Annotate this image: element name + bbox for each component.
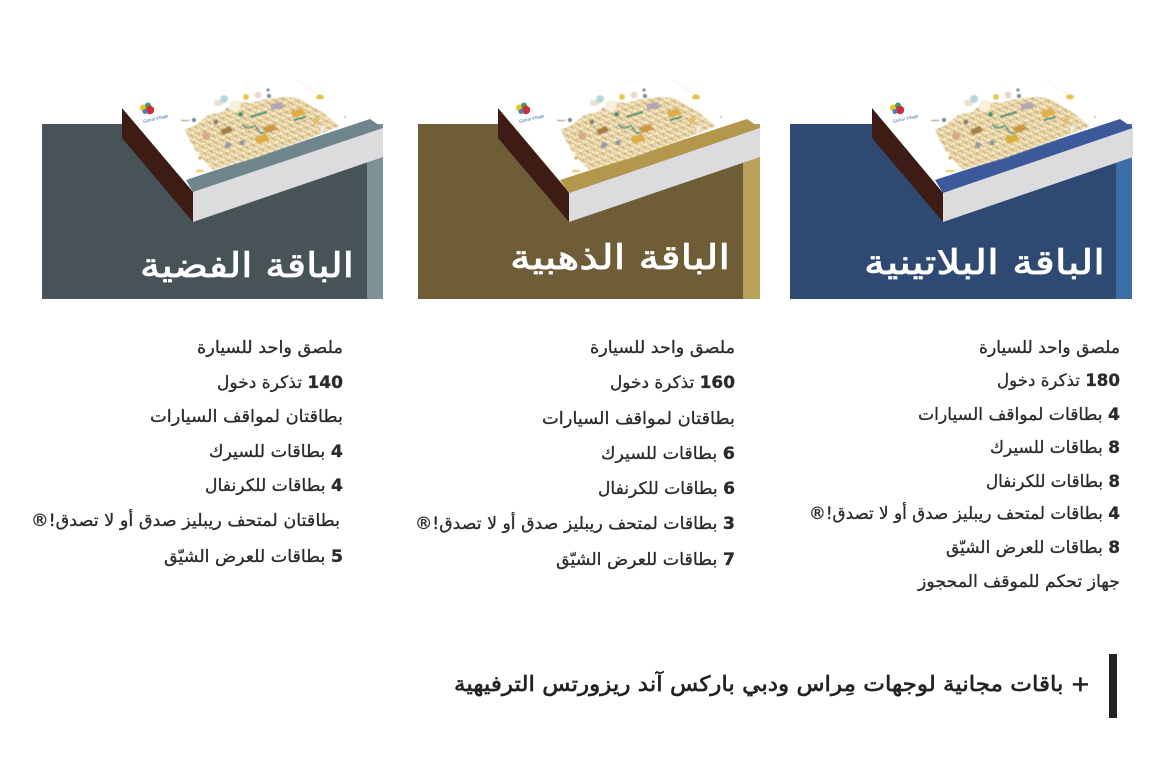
list: platinum package benefits: 8 بطاقات للسيرك <box>990 438 1120 458</box>
book illustration: silver <box>122 70 383 222</box>
panel accent stripe <box>743 124 760 299</box>
list: gold package benefits: ملصق واحد للسيارة <box>590 338 735 358</box>
list: platinum package benefits: 4 بطاقات لمتحف ريبليز صدق أو لا تصدق!® <box>809 502 1120 524</box>
list: silver package benefits: 140 تذكرة دخول <box>217 373 343 393</box>
list: gold package benefits: 160 تذكرة دخول <box>610 373 735 393</box>
book illustration: gold <box>498 70 760 222</box>
list: gold package benefits: 3 بطاقات لمتحف ريبليز صدق أو لا تصدق!® <box>415 512 735 534</box>
footer note <box>454 654 1117 718</box>
panel background <box>418 124 760 299</box>
panel background <box>42 124 383 299</box>
list: silver package benefits: بطاقتان لمتحف ريبليز صدق أو لا تصدق!® <box>31 509 340 531</box>
panel background <box>790 124 1132 299</box>
list: gold package benefits: 7 بطاقات للعرض الشيّق <box>556 550 735 570</box>
list: platinum package benefits <box>809 338 1120 592</box>
list: platinum package benefits: 180 تذكرة دخول <box>997 371 1120 391</box>
heading: platinum package: الباقة البلاتينية <box>864 243 1105 283</box>
list: silver package benefits <box>31 338 343 567</box>
list: silver package benefits: 4 بطاقات للكرنفال <box>205 476 343 496</box>
list: platinum package benefits: جهاز تحكم للموقف المحجوز <box>917 572 1120 592</box>
panel accent stripe <box>367 124 383 299</box>
heading: gold package: الباقة الذهبية <box>510 238 730 278</box>
list: gold package benefits: 6 بطاقات للكرنفال <box>598 479 735 499</box>
panel: gold package <box>418 70 760 299</box>
panel accent stripe <box>1116 124 1132 299</box>
list: silver package benefits: ملصق واحد للسيارة <box>197 338 343 358</box>
list: gold package benefits <box>415 338 735 570</box>
list: gold package benefits: بطاقتان لمواقف السيارات <box>542 409 735 429</box>
list: silver package benefits: بطاقتان لمواقف السيارات <box>150 407 343 427</box>
book illustration: platinum <box>872 70 1133 222</box>
list: platinum package benefits: 8 بطاقات للعرض الشيّق <box>946 538 1120 558</box>
heading: silver package: الباقة الفضية <box>140 246 354 286</box>
list: platinum package benefits: ملصق واحد للسيارة <box>979 338 1120 358</box>
list: silver package benefits: 5 بطاقات للعرض الشيّق <box>164 547 343 567</box>
panel: silver package <box>42 70 383 299</box>
footer text: + باقات مجانية لوجهات مِراس ودبي باركس آند ريزورتس الترفيهية <box>454 671 1090 696</box>
list: silver package benefits: 4 بطاقات للسيرك <box>209 442 343 462</box>
footer vertical bar <box>1109 654 1117 718</box>
list: platinum package benefits: 4 بطاقات لمواقف السيارات <box>918 405 1120 425</box>
panel: platinum package <box>790 70 1133 299</box>
list: gold package benefits: 6 بطاقات للسيرك <box>601 444 735 464</box>
list: platinum package benefits: 8 بطاقات للكرنفال <box>986 472 1120 492</box>
